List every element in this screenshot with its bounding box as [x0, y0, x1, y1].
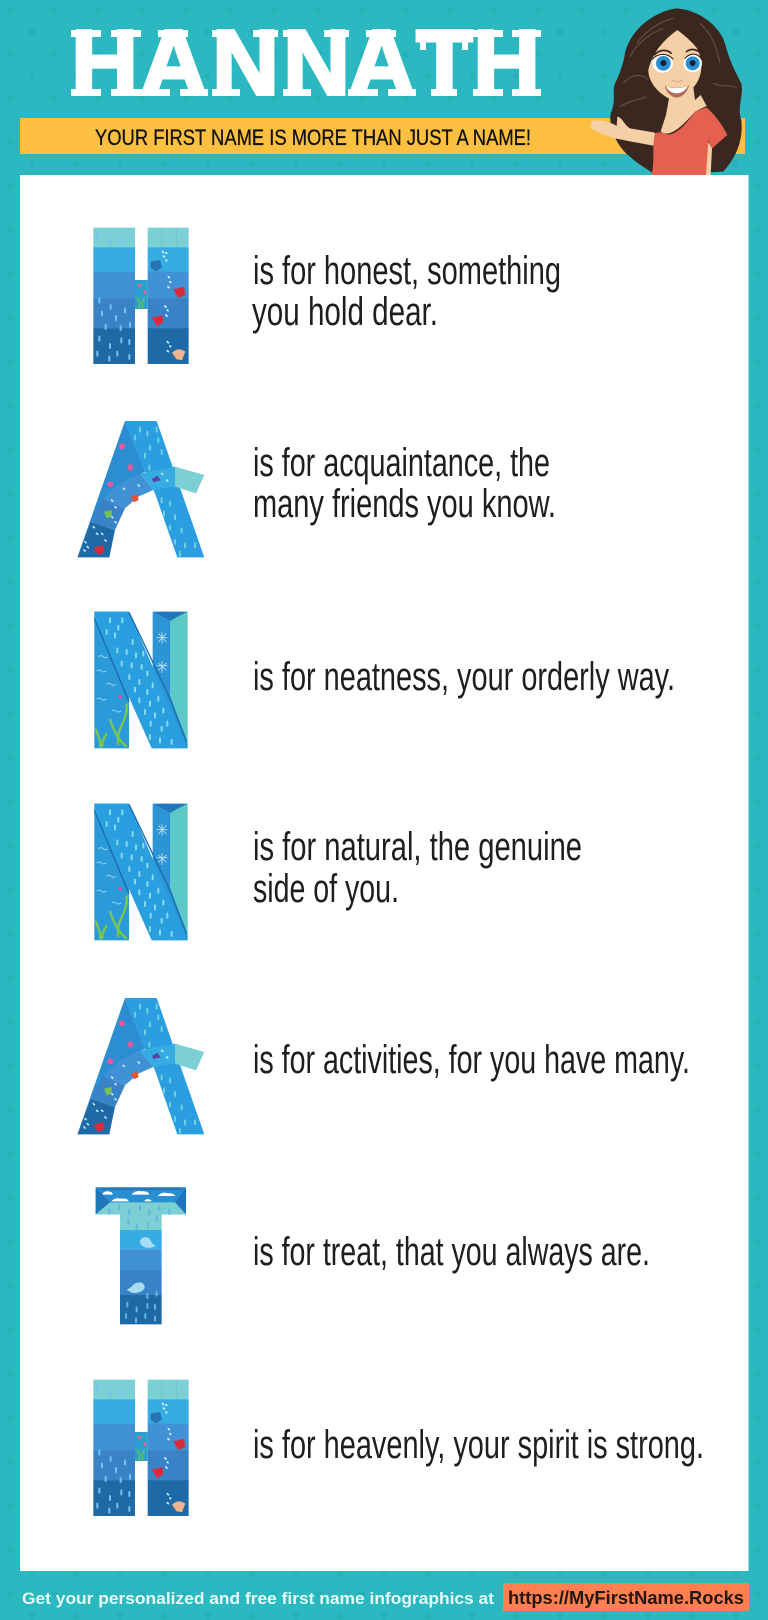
text: A line: is for acquaintance, the: [253, 441, 550, 485]
footer call to action: Get your personalized and free first name infographics at: [22, 1589, 494, 1608]
letter T: [96, 1187, 186, 1324]
letter A: [77, 421, 204, 557]
title: HANNATH: [71, 10, 540, 114]
footer link badge: https://MyFirstName.Rocks: [508, 1588, 744, 1608]
text: N line: side of you.: [253, 867, 399, 911]
letter H: [93, 228, 189, 364]
tagline banner: YOUR FIRST NAME IS MORE THAN JUST A NAME!: [95, 125, 531, 150]
text: H line: you hold dear.: [252, 290, 438, 334]
text: H line: [252, 249, 561, 334]
text: N line: is for natural, the genuine: [253, 825, 582, 869]
text: A line: [253, 441, 556, 526]
text: N line: [253, 825, 582, 911]
text: A line: many friends you know.: [253, 482, 556, 526]
footer link badge: [503, 1583, 749, 1611]
character illustration: [590, 8, 742, 175]
letter H: [93, 1380, 189, 1516]
letter A: [77, 998, 204, 1134]
tagline banner: [20, 118, 745, 154]
letter N: [94, 612, 188, 748]
letter N: [94, 804, 188, 940]
text: H line: is for honest, something: [253, 249, 561, 293]
